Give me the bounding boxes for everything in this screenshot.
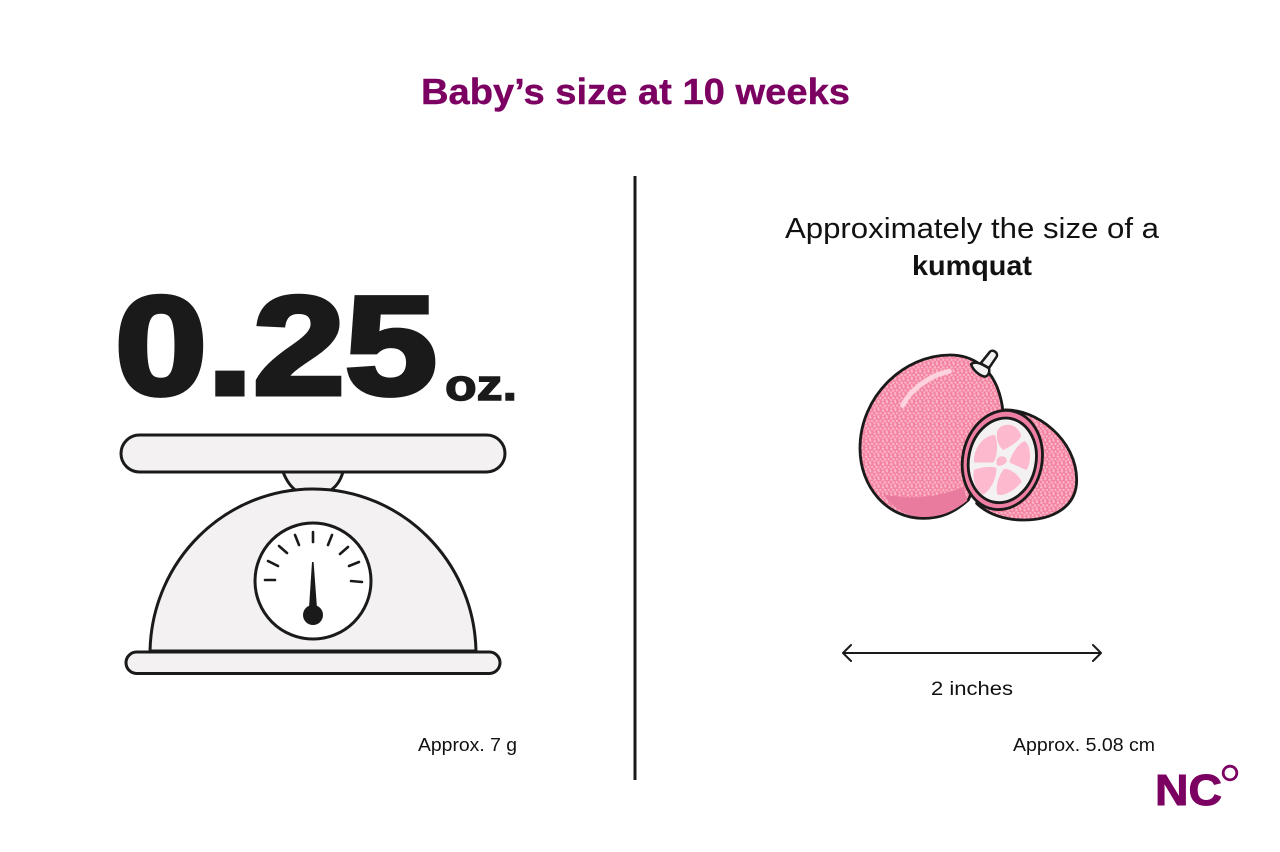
center divider xyxy=(634,176,636,780)
scale body xyxy=(150,489,476,651)
weight value: 0.25 xyxy=(115,267,437,424)
fruit shadow xyxy=(883,487,967,517)
comparison heading xyxy=(785,213,1159,281)
scale base xyxy=(126,652,500,674)
comparison heading: kumquat xyxy=(912,250,1032,281)
size metric note: Approx. 5.08 cm xyxy=(1013,735,1155,755)
weight value xyxy=(115,267,517,424)
rind xyxy=(953,403,1052,517)
icon: kitchen scale xyxy=(121,435,505,674)
comparison heading: Approximately the size of a xyxy=(785,213,1159,245)
stem xyxy=(971,351,997,377)
scale tray xyxy=(121,435,505,472)
segments xyxy=(975,426,1029,494)
panel: size comparison xyxy=(785,213,1159,755)
title: Baby’s size at 10 weeks xyxy=(421,71,850,112)
icon: kumquat xyxy=(860,351,1077,520)
dial needle xyxy=(309,562,317,608)
flesh xyxy=(961,412,1044,509)
whole fruit xyxy=(860,355,1003,518)
cut half xyxy=(977,410,1077,520)
weight metric note: Approx. 7 g xyxy=(418,734,517,755)
panel: weight xyxy=(115,267,517,755)
logo: NC xyxy=(1155,766,1222,815)
weight value: oz. xyxy=(445,361,517,410)
scale neck xyxy=(283,472,343,491)
highlight xyxy=(903,371,949,405)
width label: 2 inches xyxy=(931,678,1013,700)
scale dial xyxy=(255,523,371,639)
width arrow xyxy=(843,645,1101,661)
